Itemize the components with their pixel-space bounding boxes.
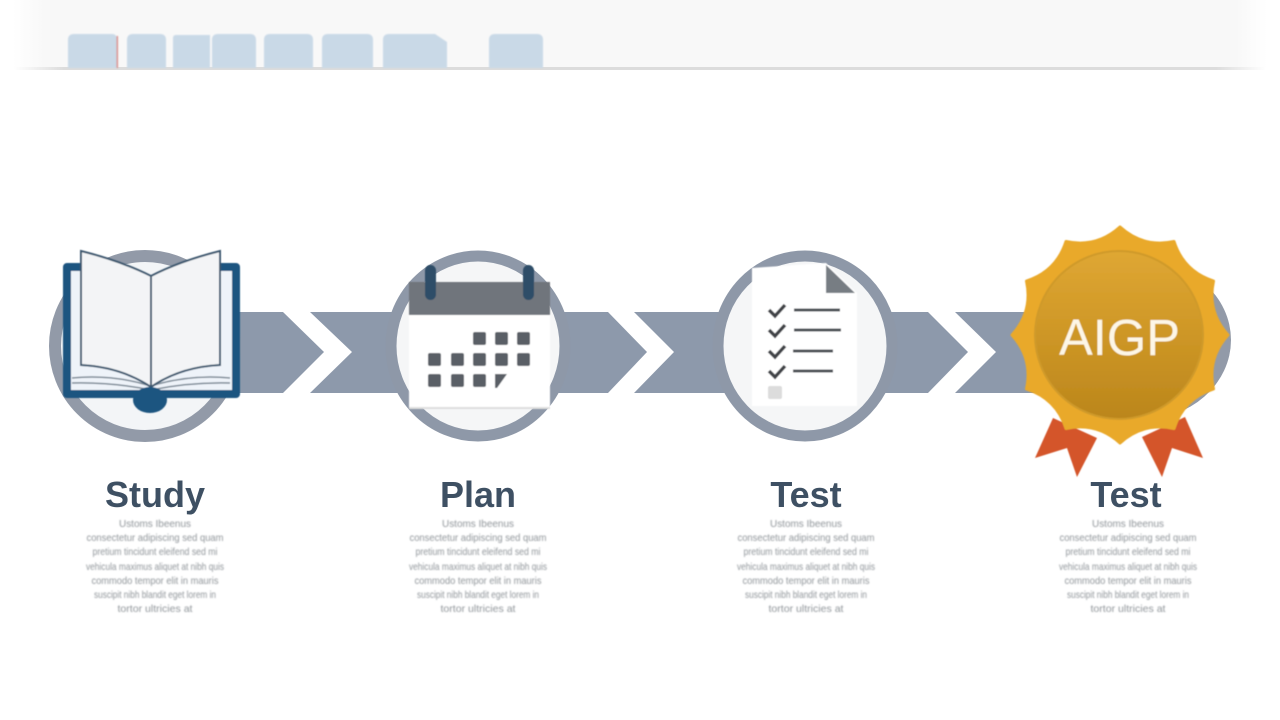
text block: Test bbox=[737, 518, 875, 615]
text block: Test: tortor ultricies at bbox=[768, 603, 844, 615]
process arrows bbox=[225, 312, 1100, 393]
text block: Test (certification): vehicula maximus aliquet at nibh quis bbox=[1059, 561, 1197, 573]
icon: calendar bbox=[409, 265, 550, 409]
top navigation bar bbox=[0, 0, 1280, 70]
gray step 4 backing behind badge bbox=[1049, 260, 1231, 420]
text block: Test (certification): consectetur adipiscing sed quam bbox=[1060, 532, 1197, 544]
checklist lines bbox=[793, 310, 841, 371]
heading: Test (certification): Test bbox=[1090, 474, 1162, 515]
step 3 circle bbox=[718, 256, 892, 436]
text block: Plan: vehicula maximus aliquet at nibh quis bbox=[409, 561, 547, 573]
heading: Test: Test bbox=[770, 474, 842, 515]
text block: Study: tortor ultricies at bbox=[118, 603, 193, 615]
text block: Test (certification): Ustoms Ibeenus bbox=[1092, 518, 1164, 530]
heading: Plan: Plan bbox=[440, 474, 516, 515]
step 2 circle bbox=[391, 256, 565, 436]
calendar day squares bbox=[428, 332, 530, 388]
text block: Study: pretium tincidunt eleifend sed mi bbox=[92, 546, 218, 558]
text block: Study: Ustoms Ibeenus bbox=[119, 518, 191, 530]
text block: Study: suscipit nibh blandit eget lorem in bbox=[94, 589, 216, 601]
badge ribbons bbox=[1035, 417, 1203, 477]
text block: Test (certification) bbox=[1059, 518, 1197, 615]
navigation tabs bbox=[68, 34, 543, 68]
text block: Test: consectetur adipiscing sed quam bbox=[738, 532, 875, 544]
text block: Plan bbox=[409, 518, 547, 615]
text block: Plan: tortor ultricies at bbox=[440, 603, 516, 615]
text block: Plan: Ustoms Ibeenus bbox=[442, 518, 514, 530]
text block: Test: vehicula maximus aliquet at nibh quis bbox=[737, 561, 875, 573]
icon: AIGP certification badge: AIGP bbox=[1059, 309, 1180, 366]
text block: Plan: suscipit nibh blandit eget lorem in bbox=[417, 589, 539, 601]
text block: Test: Ustoms Ibeenus bbox=[770, 518, 842, 530]
text block: Test: suscipit nibh blandit eget lorem in bbox=[745, 589, 867, 601]
step 1 circle bbox=[55, 256, 235, 436]
text block: Study bbox=[86, 518, 224, 615]
text block: Study: vehicula maximus aliquet at nibh quis bbox=[86, 561, 224, 573]
text block: Plan: commodo tempor elit in mauris bbox=[414, 575, 542, 587]
checkmarks bbox=[769, 305, 785, 377]
text block: Study: consectetur adipiscing sed quam bbox=[86, 532, 224, 544]
text block: Plan: pretium tincidunt eleifend sed mi bbox=[416, 546, 540, 558]
text block: Test (certification): pretium tincidunt eleifend sed mi bbox=[1066, 546, 1190, 558]
text block: Test: pretium tincidunt eleifend sed mi bbox=[744, 546, 868, 558]
icon: open book bbox=[67, 251, 236, 413]
text block: Test (certification): tortor ultricies at bbox=[1090, 603, 1166, 615]
text block: Test: commodo tempor elit in mauris bbox=[742, 575, 870, 587]
icon: checklist document bbox=[752, 263, 857, 406]
text block: Study: commodo tempor elit in mauris bbox=[92, 575, 218, 587]
heading: Study: Study bbox=[105, 474, 205, 515]
text block: Test (certification): commodo tempor elit in mauris bbox=[1064, 575, 1192, 587]
text block: Test (certification): suscipit nibh blandit eget lorem in bbox=[1067, 589, 1189, 601]
icon: AIGP certification badge bbox=[1012, 227, 1228, 477]
text block: Plan: consectetur adipiscing sed quam bbox=[410, 532, 547, 544]
